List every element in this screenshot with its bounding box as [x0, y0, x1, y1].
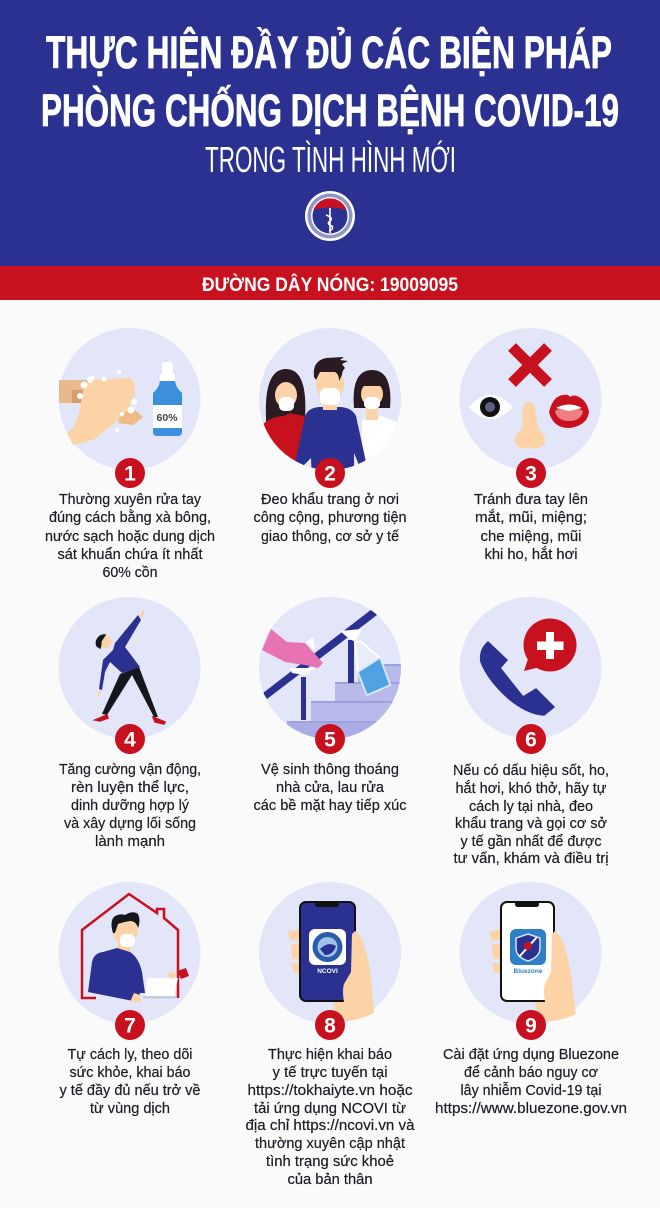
text: step 3	[474, 492, 588, 563]
text: step 7: từ vùng dịch	[90, 1101, 170, 1117]
number badge 2	[315, 458, 345, 488]
number badge 4	[115, 724, 145, 754]
text: step 6	[453, 763, 609, 867]
number badge 1: 1	[124, 462, 136, 486]
text: step 8: địa chỉ https://ncovi.vn và	[246, 1118, 415, 1134]
icon: red cross	[512, 347, 548, 383]
panel: step 3 avoid touching face	[460, 328, 602, 563]
number badge 1	[115, 458, 145, 488]
text: step 2: Đeo khẩu trang ở nơi	[261, 492, 399, 508]
text: step 7	[60, 1047, 200, 1117]
text: step 4: và xây dựng lối sống	[64, 816, 196, 832]
panel: step 4 exercise	[58, 597, 201, 850]
text: step 1: đúng cách bằng xà bông,	[49, 509, 211, 526]
number badge 3	[516, 458, 546, 488]
icon: hand holding phone with NCOVI app: NCOVI	[317, 968, 338, 975]
text: step 5: nhà cửa, lau rửa	[276, 780, 385, 796]
text: step 1	[45, 492, 215, 581]
number badge 5	[315, 724, 345, 754]
text: step 6: tư vấn, khám và điều trị	[454, 851, 608, 867]
icon: three people wearing masks	[264, 357, 397, 468]
text: step 7: y tế đầy đủ nếu trở về	[60, 1083, 200, 1099]
icon: mouth	[549, 395, 589, 428]
number badge 3: 3	[525, 462, 537, 486]
panel: step 9 Bluezone app	[435, 882, 627, 1117]
panel: step 6 call for help	[453, 597, 609, 867]
text: step 7: sức khỏe, khai báo	[70, 1065, 190, 1081]
text: step 9: lây nhiễm Covid-19 tại	[460, 1082, 602, 1099]
number badge 8	[315, 1010, 345, 1040]
number badge 5: 5	[324, 728, 336, 752]
text: step 8: của bản thân	[288, 1172, 372, 1188]
panel: step 2 wearing masks	[254, 328, 406, 545]
subtitle: TRONG TÌNH HÌNH MỚI	[205, 139, 456, 180]
icon: hand holding phone with Bluezone app	[489, 902, 576, 1022]
text: step 3: Tránh đưa tay lên	[474, 492, 588, 508]
text: step 4: dinh dưỡng hợp lý	[71, 798, 190, 814]
text: step 1: nước sạch hoặc dung dịch	[45, 529, 215, 545]
number badge 9: 9	[525, 1014, 537, 1038]
text: step 4	[59, 762, 201, 850]
text: step 8: thường xuyên cập nhật	[255, 1136, 405, 1152]
text: step 2: công cộng, phương tiện	[254, 510, 406, 526]
text: step 4: rèn luyện thể lực,	[71, 780, 189, 796]
text: step 8: tình trạng sức khoẻ	[266, 1154, 394, 1170]
icon: washing hands	[59, 370, 143, 445]
text: step 9: để cảnh báo nguy cơ	[464, 1065, 598, 1081]
text: step 1: sát khuẩn chứa ít nhất	[58, 547, 202, 563]
text: step 8	[246, 1047, 415, 1188]
text: step 2: giao thông, cơ sở y tế	[261, 529, 399, 545]
panel: step 8 NCOVI app	[246, 882, 415, 1188]
text: step 9: Cài đặt ứng dụng Bluezone	[443, 1047, 619, 1063]
icon: medical speech bubble	[524, 618, 576, 672]
text: step 6: khẩu trang và gọi cơ sở	[455, 816, 607, 832]
number badge 8: 8	[324, 1014, 336, 1038]
icon: man stretching	[95, 608, 165, 724]
icon: telephone handset	[481, 642, 554, 715]
header banner	[0, 0, 660, 266]
panel: step 5 disinfect surfaces	[254, 597, 408, 814]
text: step 8: https://tokhaiyte.vn hoặc	[248, 1083, 412, 1099]
text: step 8: Thực hiện khai báo	[268, 1047, 392, 1063]
text: step 2	[254, 492, 406, 545]
text: step 3: che miệng, mũi	[480, 529, 582, 545]
text: step 6: Nếu có dấu hiệu sốt, ho,	[453, 763, 609, 779]
panel: step 1 hand washing	[45, 328, 215, 581]
title	[41, 27, 619, 136]
number badge 7	[115, 1010, 145, 1040]
text: step 1: Thường xuyên rửa tay	[59, 492, 202, 508]
text: step 6: cách ly tại nhà, đeo	[469, 799, 593, 815]
icon: hand holding phone with NCOVI app	[288, 902, 374, 1021]
text: step 4: Tăng cường vận động,	[59, 762, 201, 778]
hotline bar: ĐƯỜNG DÂY NÓNG: 19009095	[202, 274, 458, 296]
icon: health ministry emblem	[305, 191, 355, 241]
text: step 9	[435, 1047, 627, 1117]
icon: sanitizer bottle: 60%	[156, 412, 178, 424]
text: step 8: y tế trực tuyến tại	[272, 1065, 388, 1081]
text: step 5: các bề mặt hay tiếp xúc	[254, 798, 406, 814]
text: step 9: https://www.bluezone.gov.vn	[435, 1101, 627, 1117]
text: step 5: Vệ sinh thông thoáng	[261, 762, 399, 778]
icon: person with mask and laptop	[88, 912, 189, 1002]
number badge 6	[516, 724, 546, 754]
text: step 5	[254, 762, 406, 814]
text: step 8: tải ứng dụng NCOVI từ	[254, 1101, 406, 1117]
text: step 4: lành mạnh	[95, 834, 165, 850]
text: step 6: y tế gần nhất để được	[460, 834, 602, 850]
panel: step 7 self isolate	[58, 882, 200, 1117]
number badge 6: 6	[525, 728, 537, 752]
icon: nose	[515, 402, 545, 448]
number badge 7: 7	[124, 1014, 136, 1038]
icon: stairs, railing and cleaning	[262, 610, 401, 738]
icon: eye	[469, 395, 513, 419]
text: step 6: hắt hơi, khó thở, hãy tự	[456, 780, 607, 797]
text: step 1: 60% cồn	[102, 565, 158, 581]
text: step 7: Tự cách ly, theo dõi	[68, 1047, 192, 1063]
hotline bar	[0, 266, 660, 300]
text: step 3: khi ho, hắt hơi	[484, 546, 578, 563]
number badge 4: 4	[124, 728, 136, 752]
text: step 3: mắt, mũi, miệng;	[475, 509, 587, 526]
icon: hand holding phone with Bluezone app: Bluezone	[514, 968, 543, 975]
number badge 2: 2	[324, 462, 336, 486]
icon: sanitizer bottle	[153, 362, 182, 436]
icon: house outline	[82, 894, 178, 998]
number badge 9	[516, 1010, 546, 1040]
